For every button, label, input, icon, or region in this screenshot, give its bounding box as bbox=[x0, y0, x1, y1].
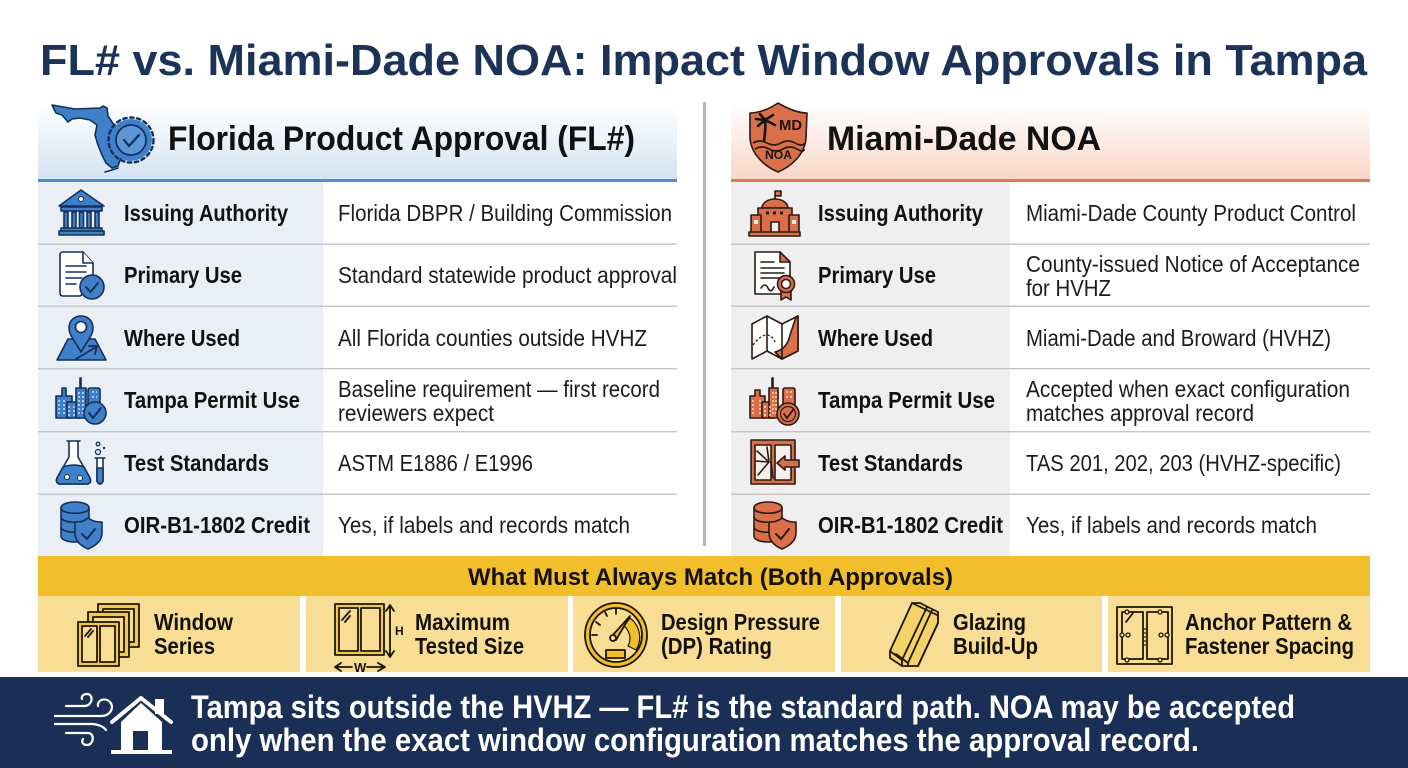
item: Glazing Build-Up bbox=[841, 596, 1102, 672]
row: Issuing Authority bbox=[749, 191, 1356, 236]
label bbox=[953, 609, 1038, 659]
icon: pressure gauge bbox=[585, 603, 647, 667]
value: Yes, if labels and records match bbox=[1026, 512, 1317, 538]
heading: Florida Product Approval: Florida Product Approval (FL#) bbox=[168, 120, 635, 158]
callout text bbox=[191, 689, 1295, 758]
row: Primary Use bbox=[60, 252, 677, 299]
icon: Miami-Dade shield: MD bbox=[779, 117, 802, 134]
panel: What Must Always Match bbox=[38, 556, 1370, 675]
label: Anchor Pattern & bbox=[1185, 609, 1352, 635]
label: Test Standards bbox=[818, 450, 963, 476]
value bbox=[1026, 251, 1360, 301]
icon: wind and house bbox=[55, 694, 172, 754]
value: County-issued Notice of Acceptance bbox=[1026, 251, 1360, 277]
label: Issuing Authority bbox=[124, 200, 288, 226]
icon: folded map bbox=[752, 316, 798, 359]
callout text: only when the exact window configuration matches the approval record. bbox=[191, 722, 1199, 758]
row: OIR credit bbox=[754, 502, 1317, 549]
heading: Miami-Dade NOA: Miami-Dade NOA bbox=[827, 120, 1101, 158]
row: Issuing Authority bbox=[59, 190, 672, 235]
label: Window bbox=[154, 609, 233, 635]
value: for HVHZ bbox=[1026, 275, 1111, 301]
value: Yes, if labels and records match bbox=[338, 512, 630, 538]
label: Primary Use bbox=[124, 262, 242, 288]
center divider bbox=[703, 102, 706, 546]
value: ASTM E1886 / E1996 bbox=[338, 450, 533, 476]
item: Maximum Tested Size bbox=[306, 596, 568, 675]
row: Primary Use bbox=[755, 251, 1360, 301]
row: Where Used bbox=[752, 316, 1331, 359]
panel: Miami-Dade NOA bbox=[731, 103, 1370, 556]
label: Glazing bbox=[953, 609, 1026, 635]
panel: Florida Product Approval bbox=[38, 105, 677, 556]
label: Series bbox=[154, 633, 215, 659]
icon: courthouse bbox=[749, 191, 800, 236]
callout banner bbox=[0, 677, 1408, 768]
row: OIR credit bbox=[61, 502, 630, 549]
label: Maximum bbox=[415, 609, 510, 635]
icon: lab flask bbox=[56, 441, 105, 484]
icon: map pin bbox=[57, 316, 106, 360]
icon: city with check bbox=[750, 378, 799, 425]
icon: database with shield bbox=[61, 502, 102, 549]
label: (DP) Rating bbox=[661, 633, 772, 659]
value: matches approval record bbox=[1026, 400, 1254, 426]
value: Accepted when exact configuration bbox=[1026, 376, 1350, 402]
row: Where Used bbox=[57, 316, 647, 360]
icon: Florida map with badge bbox=[52, 105, 154, 172]
label: Test Standards bbox=[124, 450, 269, 476]
label bbox=[415, 609, 524, 659]
value: Baseline requirement — first record bbox=[338, 376, 660, 402]
label: Where Used bbox=[124, 325, 240, 351]
icon: bank building bbox=[59, 190, 104, 235]
icon: certificate document with ribbon bbox=[755, 252, 794, 300]
value: All Florida counties outside HVHZ bbox=[338, 325, 647, 351]
icon: database with shield bbox=[754, 502, 796, 549]
icon: window with dimensions: H bbox=[395, 624, 404, 638]
label: Fastener Spacing bbox=[1185, 633, 1354, 659]
label bbox=[1185, 609, 1354, 659]
value bbox=[338, 376, 660, 426]
icon: window with dimensions bbox=[335, 604, 404, 675]
panel header: Florida bbox=[38, 105, 677, 182]
label: Issuing Authority bbox=[818, 200, 983, 226]
icon: Miami-Dade shield: NOA bbox=[765, 148, 792, 162]
label: Tampa Permit Use bbox=[124, 387, 300, 413]
callout text: Tampa sits outside the HVHZ — FL# is the standard path. NOA may be accepted bbox=[191, 689, 1295, 725]
panel header: Miami-Dade bbox=[731, 103, 1370, 182]
item: Window Series bbox=[38, 596, 300, 672]
icon: Miami-Dade shield bbox=[750, 103, 807, 172]
row: Tampa Permit Use bbox=[750, 376, 1350, 426]
label: Primary Use bbox=[818, 262, 936, 288]
label bbox=[661, 609, 820, 659]
label: Build-Up bbox=[953, 633, 1038, 659]
label: Tampa Permit Use bbox=[818, 387, 995, 413]
value bbox=[1026, 376, 1350, 426]
icon: document with check bbox=[60, 252, 104, 299]
band heading: What Must Always Match (Both Approvals) bbox=[468, 564, 953, 591]
value: Standard statewide product approval bbox=[338, 262, 677, 288]
label: OIR-B1-1802 Credit bbox=[124, 512, 310, 538]
label: OIR-B1-1802 Credit bbox=[818, 512, 1003, 538]
value: TAS 201, 202, 203 (HVHZ-specific) bbox=[1026, 450, 1341, 476]
label bbox=[154, 609, 233, 659]
label: Design Pressure bbox=[661, 609, 820, 635]
item: Anchor Pattern and Fastener Spacing bbox=[1108, 596, 1370, 672]
band heading bbox=[38, 556, 1370, 596]
title: FL# vs. Miami-Dade NOA: Impact Window Approvals in Tampa bbox=[40, 36, 1368, 85]
row: Tampa Permit Use bbox=[56, 376, 660, 426]
icon: anchor pattern bbox=[1117, 607, 1172, 664]
row: Test Standards bbox=[751, 440, 1341, 484]
value: reviewers expect bbox=[338, 400, 495, 426]
icon: glazing layers bbox=[890, 603, 938, 666]
value: Miami-Dade and Broward (HVHZ) bbox=[1026, 325, 1331, 351]
icon: stacked windows bbox=[78, 604, 139, 666]
item: Design Pressure Rating bbox=[573, 596, 835, 672]
row: Test Standards bbox=[56, 441, 533, 484]
label: Tested Size bbox=[415, 633, 524, 659]
icon: city with check bbox=[56, 378, 106, 424]
label column background bbox=[38, 182, 323, 556]
value: Florida DBPR / Building Commission bbox=[338, 200, 672, 226]
icon: window impact bbox=[751, 440, 799, 484]
value: Miami-Dade County Product Control bbox=[1026, 200, 1356, 226]
label: Where Used bbox=[818, 325, 933, 351]
icon: window with dimensions: W bbox=[354, 660, 367, 675]
label column background bbox=[731, 182, 1010, 556]
